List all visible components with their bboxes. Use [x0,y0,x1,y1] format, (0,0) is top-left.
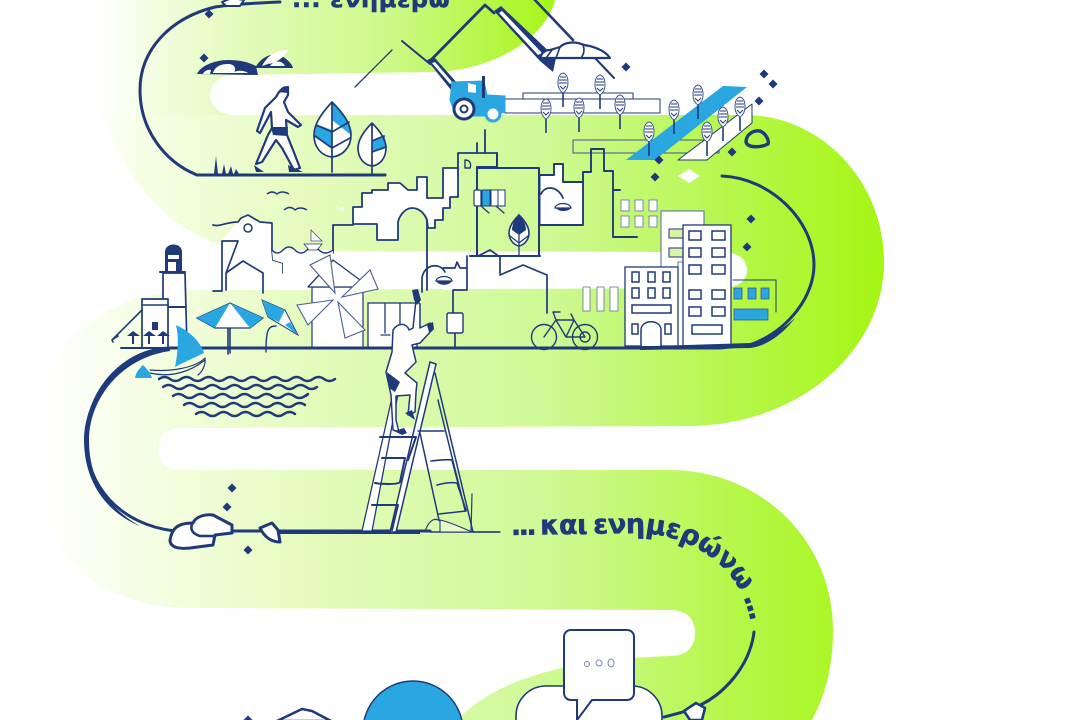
diamonds lower road [222,484,252,554]
lighthouse [112,244,187,348]
leaf tree 2 [358,123,386,173]
apartment buildings [625,211,731,346]
large speech bubble [516,686,662,720]
windmill [297,255,378,348]
building behind woman [368,303,417,348]
city: roofline above bicycle [470,250,547,313]
rock bottom left [244,709,331,720]
tractor [450,76,505,121]
rocks on mountain [541,43,614,78]
diamonds top left [200,10,214,62]
beach umbrella tilted [262,300,298,352]
leaf tree 1 [314,102,351,172]
bicycle [532,312,598,350]
white parallelogram field [678,104,752,160]
blue parallelogram field [626,86,747,160]
sailboat [135,325,205,378]
field stepped white rectangles [505,93,719,153]
city: stepped skyline [333,130,497,290]
rocks top left [197,50,293,75]
blue circle [363,681,463,720]
top rock on line [222,0,244,6]
rock on bottom road [684,703,705,720]
rocks on lower road [170,515,280,548]
wheat plants [541,73,745,156]
top road line [140,2,385,175]
middle road line [84,176,814,534]
city: lower street lamp [422,256,467,348]
small speech bubble with dots [564,630,634,720]
sea waves [159,377,335,416]
woman on ladder painting [386,289,434,435]
curved text: ... και ενημερώνω ...: ... και ενημερώνω ... [513,518,756,620]
city: small windows [583,200,657,311]
birds [267,192,307,210]
mountain lines and plough bars [355,0,573,90]
diamonds field [622,62,778,252]
wave wall with small boat [272,206,344,290]
city: central building with windows and tree [470,153,540,256]
grass tufts [214,156,239,174]
bottom road line [664,632,754,717]
stepladder [362,362,498,532]
green winding road background [30,0,884,720]
blob rock [746,131,768,147]
beach umbrella large [197,303,263,354]
church [213,215,293,293]
walker figure [254,86,303,172]
small blue-window building [733,280,776,320]
city: right block with street lamp [540,149,637,237]
